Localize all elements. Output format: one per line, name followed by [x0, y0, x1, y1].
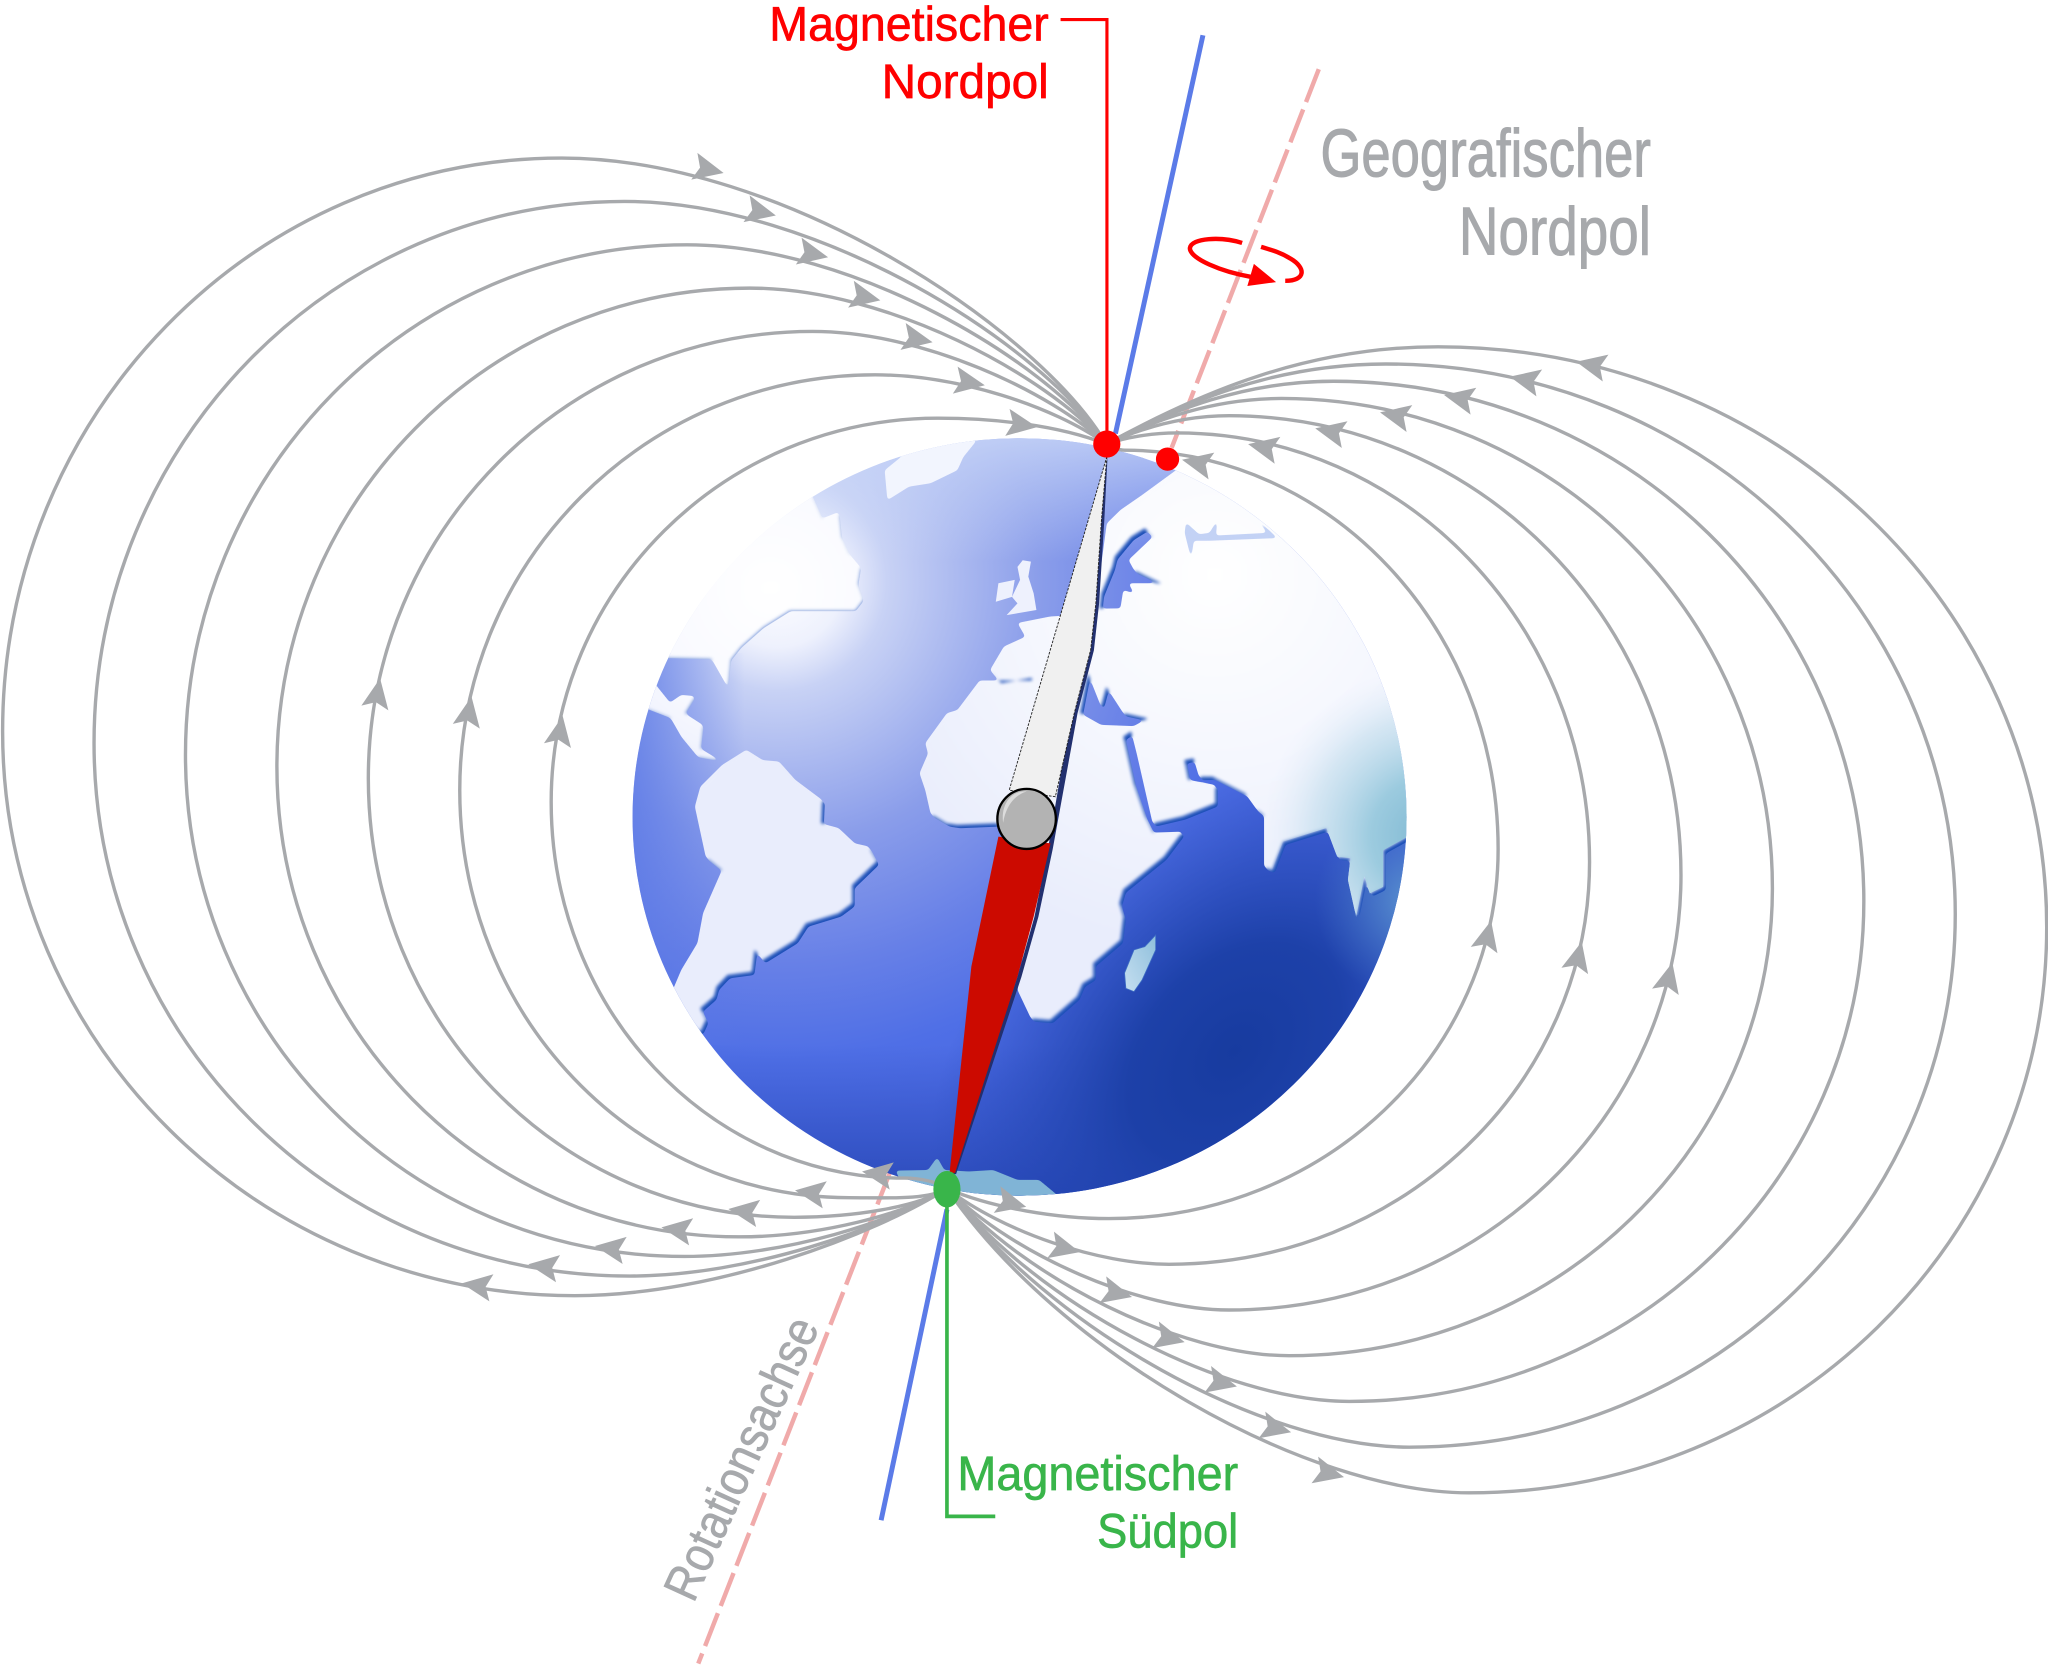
- geographic north pole dot: [1156, 447, 1179, 471]
- leader line: magnetic north: [1061, 20, 1107, 444]
- land: Antarctica: [896, 1159, 1056, 1196]
- magnetic axis: [881, 35, 1203, 1520]
- globe: [614, 431, 1439, 1215]
- land: Madagascar: [1125, 935, 1156, 992]
- leader line: magnetic south: [947, 1195, 995, 1516]
- land: South America: [666, 750, 879, 1035]
- magnetic north pole dot: [1093, 430, 1120, 458]
- compass needle: [950, 456, 1108, 1174]
- icon: rotation arrow: [1190, 239, 1302, 286]
- needle shadow: [952, 456, 1108, 1174]
- teal shading on Asia: [1271, 695, 1407, 917]
- label: Magnetischer Südpol: Südpol: [1097, 1505, 1238, 1559]
- field arrows: [361, 153, 1686, 1490]
- land: Eurasia and Africa: [920, 470, 1406, 1023]
- field lines: left side: [3, 158, 1106, 1296]
- field lines: right side: [947, 347, 2047, 1493]
- land: Greenland: [884, 440, 976, 499]
- land: Great Britain: [1007, 560, 1036, 615]
- label: Magnetischer Südpol: [957, 1447, 1238, 1559]
- label: Geografischer Nordpol: Nordpol: [1459, 195, 1651, 270]
- label: Rotationsachse: Rotationsachse: [653, 1308, 830, 1608]
- needle pivot: [997, 789, 1056, 849]
- land: Ireland: [996, 580, 1015, 602]
- label: Magnetischer Südpol: Magnetischer: [957, 1447, 1238, 1501]
- needle red half: [950, 837, 1051, 1173]
- land: North and Central America: [648, 497, 863, 760]
- label: Geografischer Nordpol: [1320, 116, 1651, 270]
- label: Geografischer Nordpol: Geografischer: [1320, 116, 1651, 191]
- label: Magnetischer Nordpol: Nordpol: [882, 55, 1049, 109]
- dashed rotation axis: [698, 69, 1319, 1664]
- White Sea inlet: [1184, 524, 1275, 554]
- magnetic south pole dot: [933, 1171, 961, 1207]
- needle white half: [1009, 457, 1107, 797]
- label: Magnetischer Nordpol: [769, 0, 1049, 109]
